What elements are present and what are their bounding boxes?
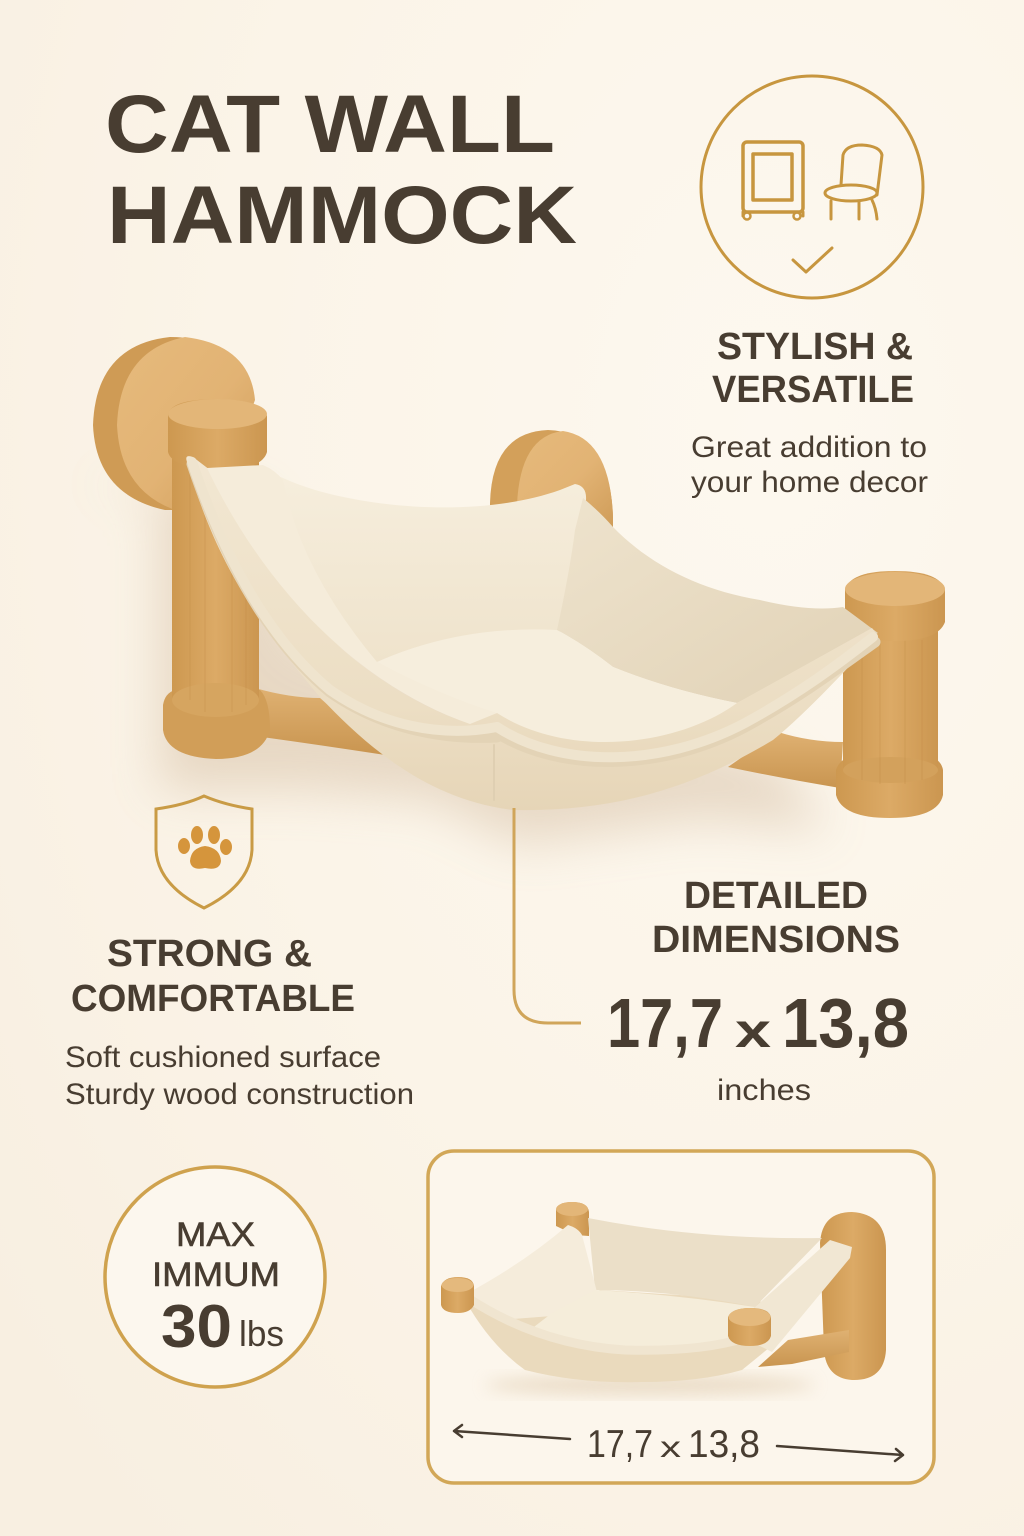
- heading: DIMENSIONS: [652, 919, 900, 961]
- dimension value: [607, 984, 909, 1062]
- dimension value: x: [735, 1005, 771, 1058]
- hammock rim: [192, 462, 875, 800]
- panel: detailed dimensions: [607, 875, 909, 1107]
- panel: stylish and versatile: [691, 76, 928, 499]
- heading: COMFORTABLE: [71, 978, 355, 1020]
- heading: [712, 326, 914, 411]
- dimension arrows: [454, 1425, 903, 1461]
- dimension label: [587, 1423, 760, 1466]
- badge: maximum weight: IMMUM: [152, 1256, 280, 1294]
- title: CAT WALL: [105, 79, 555, 170]
- thumbnail bag silhouette: [465, 1290, 775, 1382]
- badge: maximum weight: lbs: [239, 1313, 284, 1354]
- text block: your home decor: [691, 466, 928, 499]
- dimension label: 13,8: [688, 1423, 760, 1466]
- badge: maximum weight: 30: [161, 1293, 232, 1360]
- dimension value: 13,8: [782, 984, 909, 1062]
- text block: [65, 1041, 414, 1111]
- left wall mount: [93, 337, 255, 510]
- wall shadow: [85, 480, 830, 845]
- right arm: [728, 732, 843, 788]
- heading: [652, 875, 900, 961]
- hammock right side fabric: [557, 498, 878, 703]
- heading: STYLISH &: [717, 326, 913, 368]
- heading: STRONG &: [107, 933, 312, 975]
- heading: VERSATILE: [712, 369, 914, 411]
- title: [105, 79, 577, 261]
- badge: maximum weight: MAX: [176, 1216, 255, 1254]
- hammock product illustration: [93, 337, 945, 818]
- panel: product thumbnail: [428, 1151, 934, 1483]
- unit: inches: [717, 1074, 811, 1107]
- right post: [836, 571, 945, 818]
- hammock back fabric: [262, 470, 586, 662]
- panel: strong and comfortable: [65, 796, 414, 1111]
- badge: maximum weight: [105, 1167, 325, 1387]
- left post: [163, 399, 270, 759]
- title: HAMMOCK: [107, 170, 577, 261]
- icon: shield with paw: [156, 796, 252, 908]
- far wall mount: [490, 430, 613, 530]
- heading: [71, 933, 355, 1020]
- heading: DETAILED: [684, 875, 868, 917]
- dimension leader line: [514, 808, 581, 1023]
- hammock front fabric: [186, 456, 878, 810]
- hammock left inner panel: [207, 465, 497, 724]
- left arm: [255, 688, 385, 755]
- text block: [691, 431, 928, 499]
- hammock thumbnail: [441, 1202, 886, 1395]
- dimension label: x: [660, 1431, 681, 1464]
- text block: Sturdy wood construction: [65, 1078, 414, 1111]
- hammock seat: [377, 629, 773, 765]
- text block: Soft cushioned surface: [65, 1041, 381, 1074]
- dimension label: 17,7: [587, 1423, 653, 1466]
- icon: furniture badge: [701, 76, 923, 298]
- dimension value: 17,7: [607, 984, 723, 1062]
- text block: Great addition to: [691, 431, 927, 464]
